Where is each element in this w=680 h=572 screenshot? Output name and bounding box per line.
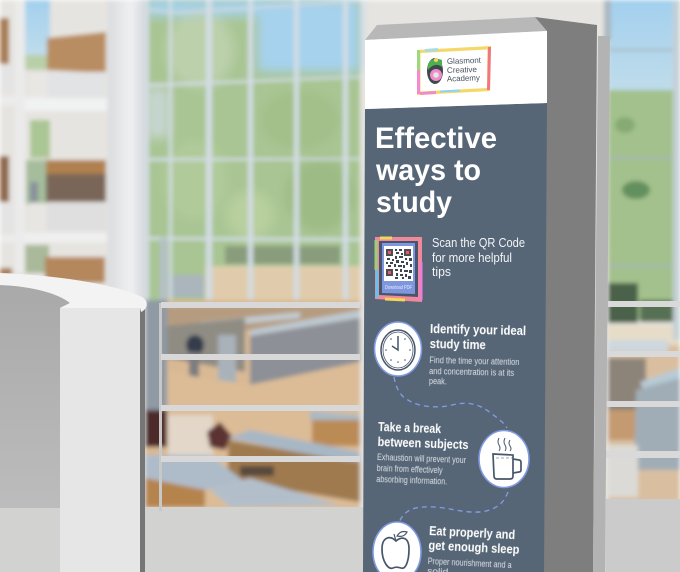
QR caption bbox=[432, 235, 525, 279]
step 1 text: peak. bbox=[429, 376, 447, 386]
dashed connector 1 bbox=[394, 377, 507, 428]
stand: right strip bbox=[593, 36, 610, 572]
QR caption: tips bbox=[432, 264, 451, 279]
mug icon bbox=[479, 430, 529, 488]
stand: top face bbox=[365, 17, 548, 40]
logo text bbox=[447, 56, 482, 83]
lower tables bbox=[145, 410, 167, 447]
outdoor ground bbox=[205, 266, 360, 302]
title: study bbox=[376, 186, 452, 219]
QR caption: Scan the QR Code bbox=[432, 235, 525, 250]
interior upper wall and shelves bbox=[0, 18, 9, 64]
QR modules bbox=[386, 249, 412, 279]
floor bbox=[0, 507, 680, 572]
stand: side face bbox=[535, 17, 597, 572]
sky and trees bbox=[25, 0, 680, 323]
step 3 text: Eat properly and bbox=[429, 524, 515, 542]
step 1 text: and concentration is at its bbox=[429, 366, 515, 378]
clock icon bbox=[374, 322, 422, 376]
step 2 text: absorbing information. bbox=[376, 474, 447, 486]
QR code block bbox=[375, 237, 422, 302]
logo text: Glasmont bbox=[447, 56, 482, 66]
step 1 text bbox=[429, 322, 526, 388]
logo text: Creative bbox=[447, 65, 478, 75]
step 3 text bbox=[427, 524, 521, 572]
step 3 text: Proper nourishment and a bbox=[427, 556, 512, 570]
step 2 text: Exhaustion will prevent your bbox=[377, 452, 466, 465]
step 2 text: brain from effectively bbox=[377, 463, 443, 475]
step 3 text: get enough sleep bbox=[428, 538, 520, 557]
step 2 text: between subjects bbox=[377, 435, 469, 452]
QR card bbox=[382, 243, 415, 294]
railing: centre bbox=[159, 302, 360, 511]
poster white header bbox=[365, 31, 547, 109]
logo mark bbox=[427, 58, 443, 84]
column bbox=[108, 0, 146, 300]
step 1 text: study time bbox=[430, 337, 486, 352]
central library shelves bbox=[145, 300, 360, 510]
title: ways to bbox=[375, 154, 481, 187]
dashed connector 2 bbox=[399, 492, 508, 523]
step 1 text: Find the time your attention bbox=[429, 355, 519, 367]
logo text: Academy bbox=[447, 73, 480, 83]
curved white ledge bbox=[0, 273, 147, 572]
title: Effective bbox=[375, 122, 497, 155]
window frames bbox=[145, 0, 360, 300]
step 1 text: Identify your ideal bbox=[430, 322, 526, 338]
apple icon bbox=[373, 522, 421, 572]
title bbox=[375, 122, 497, 219]
step 2 text: Take a break bbox=[378, 420, 441, 436]
QR download label: Download PDF bbox=[385, 285, 412, 291]
right library shelves bbox=[608, 345, 680, 510]
display stand bbox=[365, 17, 610, 572]
logo bbox=[417, 46, 491, 95]
railing: right bbox=[606, 301, 680, 572]
QR caption: for more helpful bbox=[432, 250, 512, 265]
poster panel bbox=[363, 103, 547, 572]
step 2 text bbox=[376, 420, 469, 487]
